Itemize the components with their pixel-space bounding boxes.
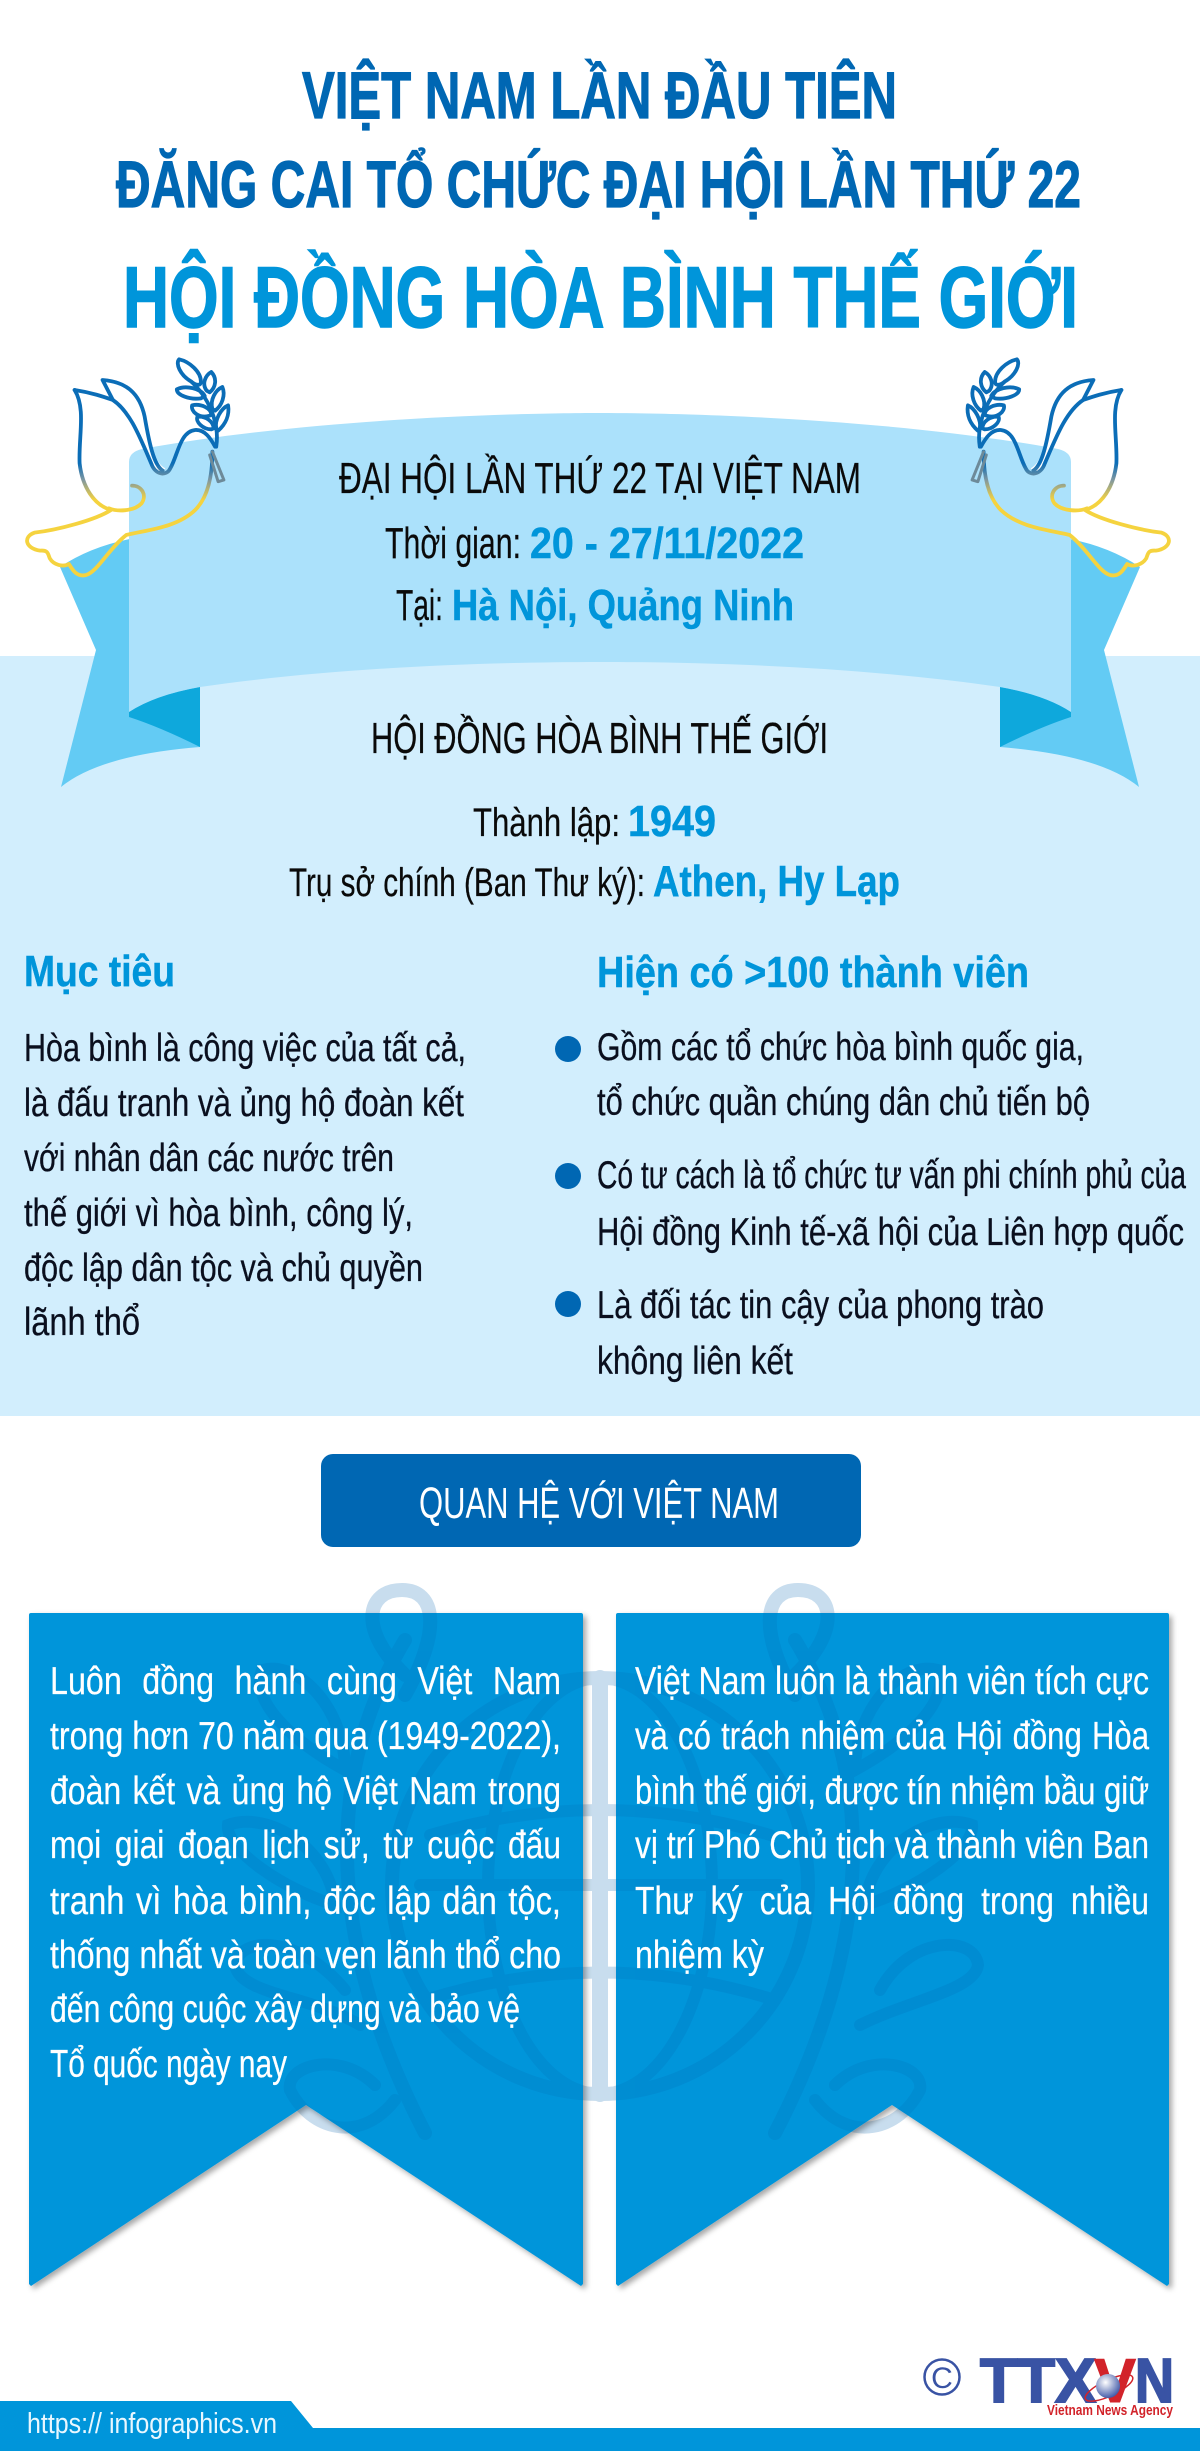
text block: council relation: thống nhất và toàn vẹn lãnh thổ cho: [50, 1934, 561, 1977]
panel: light blue information band: [0, 656, 1200, 1416]
ribbon text: congress details: [339, 453, 861, 630]
text block: council relation: Tổ quốc ngày nay: [50, 2043, 287, 2086]
text block: goals: thế giới vì hòa bình, công lý,: [24, 1192, 413, 1235]
ribbon text: congress details: 20 - 27/11/2022: [530, 519, 804, 568]
heading: goals: Mục tiêu: [24, 947, 175, 996]
list item: trusted partner: Là đối tác tin cậy của phong trào: [597, 1284, 1044, 1327]
logo: TTXVN Vietnam News Agency: N: [1135, 2347, 1174, 2416]
panel: council relation card: [29, 1613, 583, 2286]
list item: trusted partner: [555, 1284, 1044, 1383]
section heading button: relations with Vietnam: [321, 1454, 861, 1547]
text block: council relation: [50, 1660, 561, 2086]
ribbon text: congress details: ĐẠI HỘI LẦN THỨ 22 TẠI VIỆT NAM: [339, 453, 861, 503]
text block: council relation: trong hơn 70 năm qua (1949-2022),: [50, 1715, 561, 1758]
list item: consultative status: [555, 1154, 1186, 1254]
logo: TTXVN Vietnam News Agency: [980, 2347, 1174, 2419]
section heading button: relations with Vietnam: QUAN HỆ VỚI VIỆT NAM: [419, 1479, 779, 1528]
text block: goals: [24, 1027, 466, 1344]
footer bar with website: https:// infographics.vn: [27, 2408, 277, 2440]
text block: council relation: tranh vì hòa bình, độc lập dân tộc,: [50, 1880, 561, 1923]
panel: members: [555, 948, 1186, 1383]
logo: TTXVN Vietnam News Agency: V: [1094, 2347, 1136, 2416]
council overview text: 1949: [628, 797, 716, 846]
text block: goals: lãnh thổ: [24, 1301, 140, 1344]
icon: left dove with olive branch: [27, 359, 228, 575]
text block: council relation: đoàn kết và ủng hộ Việt Nam trong: [50, 1770, 561, 1813]
text block: goals: độc lập dân tộc và chủ quyền: [24, 1247, 423, 1290]
ribbon text: congress details: Hà Nội, Quảng Ninh: [452, 581, 794, 630]
text block: council relation: Luôn đồng hành cùng Việt Nam: [50, 1660, 561, 1703]
list item: national organizations: [555, 1026, 1090, 1124]
council overview text: HỘI ĐỒNG HÒA BÌNH THẾ GIỚI: [371, 713, 828, 763]
council overview text: Trụ sở chính (Ban Thư ký):: [289, 861, 645, 905]
icon: right dove with olive branch: [968, 359, 1169, 575]
icon: copyright symbol: C: [931, 2362, 953, 2395]
ribbon text: congress details: Tại:: [396, 581, 443, 630]
emblem: world peace council watermark: [228, 1590, 978, 2133]
text block: council relation: mọi giai đoạn lịch sử, từ cuộc đấu: [50, 1824, 561, 1867]
footer bar with website: [0, 2401, 1200, 2451]
emblem shown through the cards: [228, 1590, 978, 2133]
panel: goals: [24, 947, 466, 1344]
panel: Vietnam role card: [616, 1613, 1169, 2286]
text block: goals: với nhân dân các nước trên: [24, 1137, 394, 1180]
text block: Vietnam role: nhiệm kỳ: [635, 1934, 764, 1977]
title: VIỆT NAM LẦN ĐẦU TIÊN: [302, 58, 897, 132]
council overview text: Thành lập:: [473, 801, 620, 845]
text block: goals: là đấu tranh và ủng hộ đoàn kết: [24, 1082, 464, 1125]
title: [116, 58, 1081, 346]
text block: council relation: đến công cuộc xây dựng và bảo vệ: [50, 1988, 520, 2031]
text block: Vietnam role: [635, 1660, 1149, 1977]
council overview text: Athen, Hy Lạp: [653, 857, 900, 906]
ribbon text: congress details: Thời gian:: [385, 519, 521, 568]
list item: trusted partner: không liên kết: [597, 1340, 793, 1383]
icon: copyright symbol: [924, 2360, 960, 2395]
council overview text: [289, 713, 900, 906]
text block: goals: Hòa bình là công việc của tất cả,: [24, 1027, 466, 1070]
logo: TTXVN Vietnam News Agency: TTX: [980, 2347, 1096, 2416]
ribbon banner: [60, 413, 1140, 787]
heading: members: Hiện có >100 thành viên: [597, 948, 1029, 997]
